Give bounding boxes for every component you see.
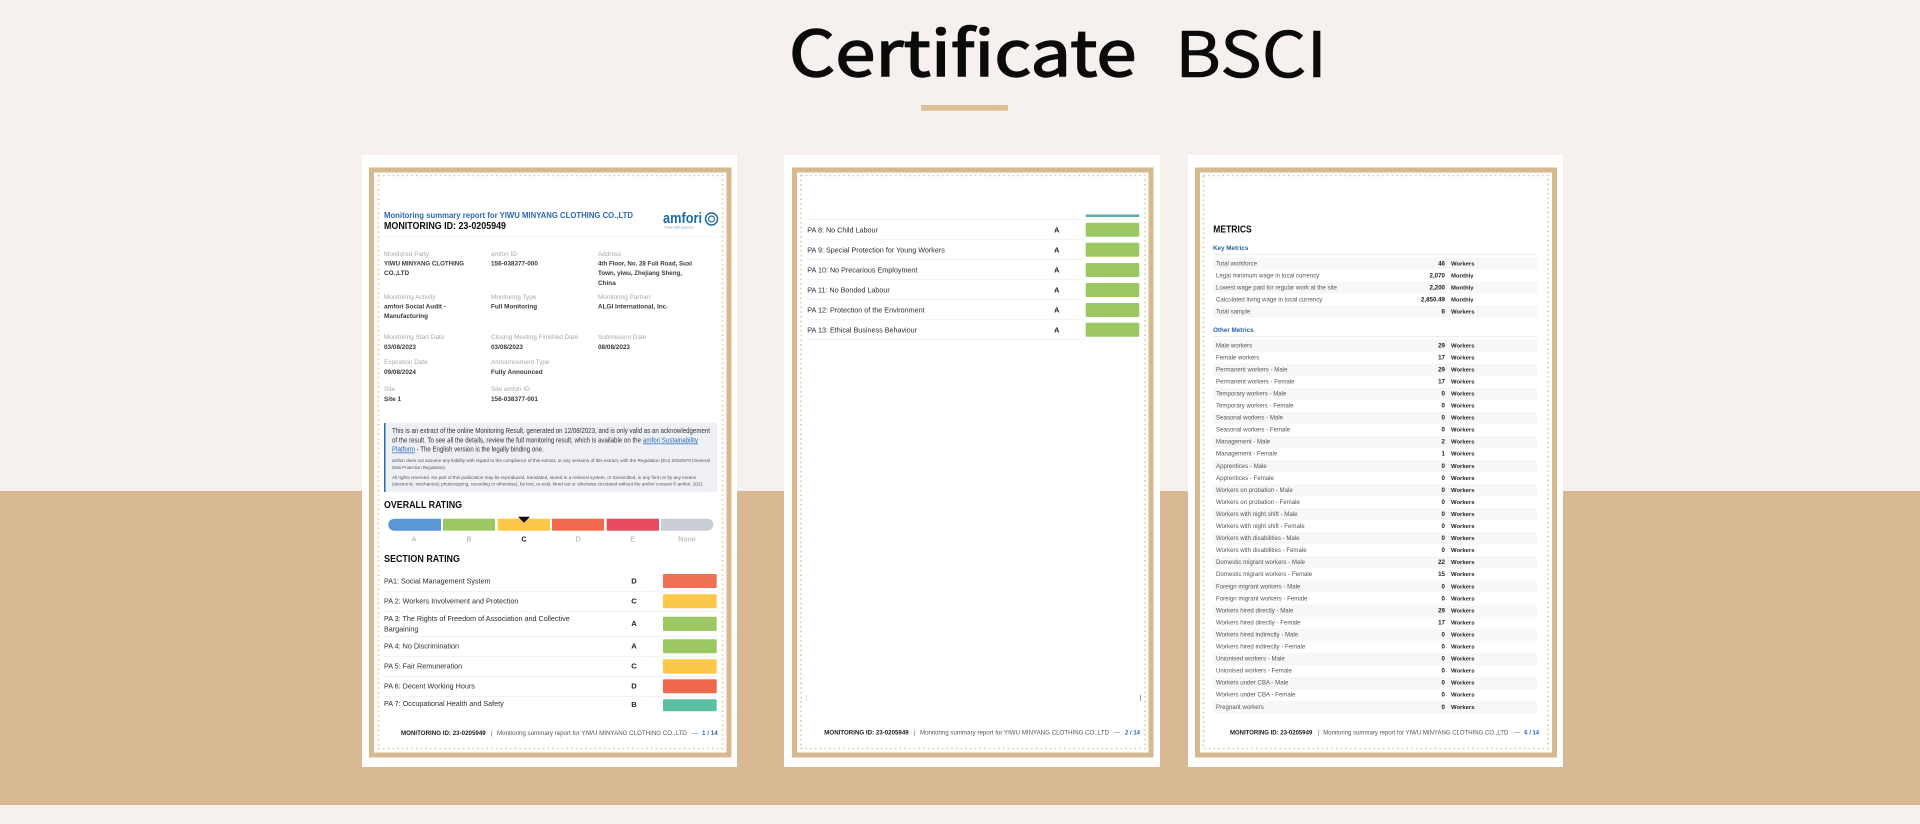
notice box: All rights reserved. No part of this publication may be reproduced, translated, stored in a retrieval system, or transmitted, in any form or by any means [392, 475, 696, 480]
key metrics table: Workers [1451, 261, 1475, 267]
audit detail fields: Site 1 [384, 396, 401, 403]
other metrics table: 0 [1442, 487, 1446, 494]
overall rating scale: None [678, 534, 696, 543]
page footer: MONITORING ID: 23-0205949 [824, 730, 909, 736]
other metrics table: 17 [1438, 354, 1446, 361]
page footer [1230, 730, 1540, 736]
overall rating scale: D [575, 534, 581, 543]
other metrics table: 0 [1442, 595, 1446, 602]
page footer: Monitoring summary report for YIWU MINYANG CLOTHING CO.,LTD [920, 730, 1110, 736]
section rating table: B [631, 700, 637, 709]
section rating table: D [631, 682, 637, 691]
other metrics table: 2 [1442, 439, 1446, 446]
report heading: MONITORING ID: 23-0205949 [384, 220, 506, 232]
other metrics table: Workers [1451, 452, 1475, 458]
audit detail fields: 03/08/2023 [491, 344, 523, 351]
audit detail fields: 156-038377-000 [491, 261, 538, 268]
other metrics table: Seasonal workers - Male [1216, 415, 1284, 422]
other metrics table: Workers [1451, 705, 1475, 711]
other metrics table: Workers [1451, 584, 1475, 590]
other metrics table: Workers [1451, 476, 1475, 482]
other metrics table: Management - Female [1216, 451, 1278, 458]
section rating continued: PA 10: No Precarious Employment [807, 265, 917, 274]
audit detail fields: Expiration Date [384, 359, 428, 366]
other metrics table: Workers [1451, 428, 1475, 434]
other metrics table: Workers [1451, 379, 1475, 385]
other metrics table: Unionised workers - Female [1216, 668, 1292, 675]
other metrics table: Apprentices - Female [1216, 475, 1275, 482]
page footer: Monitoring summary report for YIWU MINYANG CLOTHING CO.,LTD [497, 731, 687, 737]
other metrics table: 0 [1442, 583, 1446, 590]
page footer: MONITORING ID: 23-0205949 [1230, 730, 1313, 736]
key metrics table: 46 [1438, 260, 1446, 267]
audit detail fields: amfori Social Audit - [384, 304, 446, 311]
overall rating scale [388, 517, 713, 543]
report heading: Monitoring summary report for YIWU MINYANG CLOTHING CO.,LTD [384, 211, 633, 220]
other metrics table: Workers [1451, 512, 1475, 518]
other metrics table: Workers with disabilities - Female [1216, 547, 1307, 554]
other metrics table: 22 [1438, 559, 1446, 566]
other metrics table: Workers [1451, 536, 1475, 542]
audit detail fields: Closing Meeting Finished Date [491, 334, 578, 341]
audit detail fields: Town, yiwu, Zhejiang Sheng, [598, 270, 682, 277]
other metrics table: Workers [1451, 404, 1475, 410]
audit detail fields: Site [384, 386, 395, 393]
other metrics table: Domestic migrant workers - Female [1216, 571, 1313, 578]
page footer: MONITORING ID: 23-0205949 [401, 731, 486, 737]
other metrics table: Workers [1451, 657, 1475, 663]
section rating table: C [631, 597, 637, 606]
section rating continued: PA 13: Ethical Business Behaviour [807, 325, 918, 334]
section rating continued: A [1054, 305, 1060, 314]
audit detail fields: Monitoring Type [491, 294, 537, 301]
section rating table: PA 7: Occupational Health and Safety [384, 699, 504, 708]
other metrics table: Workers [1451, 440, 1475, 446]
other metrics table: 29 [1438, 607, 1446, 614]
other metrics table: Workers [1451, 560, 1475, 566]
other metrics table: Workers [1451, 596, 1475, 602]
key metrics table: Total workforce [1216, 260, 1258, 267]
other metrics table: Workers [1451, 416, 1475, 422]
title: Certificate [789, 4, 1136, 95]
key metrics table: 6 [1442, 308, 1446, 315]
section rating continued: PA 11: No Bonded Labour [807, 285, 890, 294]
other metrics table: Workers [1451, 669, 1475, 675]
rating bar remnant [1086, 214, 1139, 217]
other metrics table: 0 [1442, 668, 1446, 675]
other metrics table: Permanent workers - Female [1216, 378, 1295, 385]
other metrics table: Temporary workers - Female [1216, 402, 1294, 410]
other metrics table: 0 [1442, 511, 1446, 518]
section rating table: D [631, 577, 637, 586]
audit detail fields: 4th Floor, No. 28 Fuli Road, Suxi [598, 261, 692, 268]
key metrics table: 2,200 [1430, 284, 1446, 291]
other metrics table: Workers [1451, 524, 1475, 530]
title: BSCI [1175, 5, 1327, 96]
panel: certificate page 2 [784, 155, 1160, 767]
other metrics table: Domestic migrant workers - Male [1216, 559, 1306, 566]
overall rating scale: B [467, 534, 472, 543]
section rating continued [807, 220, 1139, 340]
other metrics table: Pregnant workers [1216, 704, 1264, 711]
key metrics table: Lowest wage paid for regular work at the site [1216, 284, 1338, 291]
other metrics table: Workers [1451, 464, 1475, 470]
key metrics table: Key Metrics [1213, 245, 1249, 252]
key metrics table: 2,850.49 [1421, 296, 1446, 303]
audit detail fields: Monitoring Start Date [384, 334, 445, 341]
audit detail fields: 09/08/2024 [384, 369, 416, 376]
other metrics table: Workers [1451, 681, 1475, 687]
other metrics table: 0 [1442, 475, 1446, 482]
other metrics table: 0 [1442, 390, 1446, 398]
other metrics table: Workers with night shift - Female [1216, 523, 1305, 530]
other metrics table: Workers [1451, 355, 1475, 361]
notice box: amfori Sustainability [643, 436, 698, 444]
page footer: Monitoring summary report for YIWU MINYANG CLOTHING CO.,LTD [1323, 730, 1509, 736]
other metrics table: Workers [1451, 488, 1475, 494]
page footer: 2 / 14 [1125, 730, 1141, 736]
other metrics table: Workers [1451, 548, 1475, 554]
other metrics table: 0 [1442, 644, 1446, 650]
overall rating scale: E [630, 534, 635, 543]
other metrics table: Female workers [1216, 354, 1259, 361]
report heading [384, 211, 633, 232]
page footer: | [1318, 730, 1320, 736]
other metrics table: Workers under CBA - Male [1216, 680, 1289, 687]
other metrics table: Workers on probation - Female [1216, 499, 1300, 506]
section rating continued: PA 12: Protection of the Environment [807, 305, 925, 314]
page footer: — [1114, 730, 1120, 736]
audit detail fields: China [598, 280, 616, 287]
other metrics table: Unionised workers - Male [1216, 656, 1285, 663]
page footer [824, 730, 1141, 736]
other metrics table: 0 [1442, 680, 1446, 687]
key metrics table: Total sample [1216, 308, 1251, 315]
key metrics table [1213, 245, 1537, 318]
audit detail fields: 156-038377-001 [491, 396, 538, 403]
audit detail fields: amfori ID [491, 251, 517, 258]
other metrics table: 0 [1442, 535, 1446, 542]
audit detail fields: Monitoring Partner [598, 294, 651, 301]
key metrics table: Monthly [1451, 273, 1474, 279]
other metrics table: 0 [1442, 704, 1446, 711]
section rating continued: PA 9: Special Protection for Young Workers [807, 245, 945, 254]
notice box: - The English version is the legally binding one. [417, 446, 544, 454]
other metrics table: 0 [1442, 415, 1446, 422]
audit detail fields: Manufacturing [384, 313, 428, 320]
other metrics table: 29 [1438, 342, 1446, 349]
overall rating scale: A [412, 534, 417, 543]
section rating continued: A [1054, 245, 1060, 254]
page footer: — [692, 731, 698, 737]
notice box: of the result. To see all the details, review the full monitoring result, which is available on the [392, 436, 641, 444]
tan background band [0, 491, 1920, 805]
section rating table: A [631, 619, 637, 628]
section rating table: PA 6: Decent Working Hours [384, 682, 475, 691]
audit detail fields: Monitored Party [384, 251, 430, 258]
other metrics table: Workers [1451, 572, 1475, 578]
section rating continued: PA 8: No Child Labour [807, 225, 878, 234]
other metrics table: 0 [1442, 547, 1446, 554]
page footer [401, 731, 718, 737]
section rating table [384, 574, 717, 711]
audit detail fields: Site amfori ID [491, 386, 530, 393]
audit detail fields: CO.,LTD [384, 270, 409, 277]
other metrics table: Foreign migrant workers - Female [1216, 595, 1308, 602]
section rating table: A [631, 642, 637, 651]
other metrics table: Apprentices - Male [1216, 463, 1267, 470]
audit detail fields: Full Monitoring [491, 304, 537, 311]
other metrics table: 17 [1438, 619, 1446, 626]
page footer: 6 / 14 [1524, 730, 1540, 736]
audit detail fields: YIWU MINYANG CLOTHING [384, 261, 464, 268]
section rating table: PA 3: The Rights of Freedom of Association and Collective [384, 614, 570, 623]
section rating continued: A [1054, 285, 1060, 294]
other metrics table [1213, 327, 1537, 713]
other metrics table: 0 [1442, 692, 1446, 699]
key metrics table: Calculated living wage in local currency [1216, 296, 1323, 303]
key metrics table: Monthly [1451, 297, 1474, 303]
other metrics table: 0 [1442, 523, 1446, 530]
notice box [384, 423, 717, 492]
notice box: (electronic, mechanical, photocopying, recording or otherwise), be lent, re-sold, hired out or otherwise circulated without the amfori consent © amfori, 2021 [392, 482, 704, 487]
key metrics table: Monthly [1451, 285, 1474, 291]
notice box: Platform [392, 446, 415, 454]
other metrics table: Workers [1451, 644, 1475, 650]
other metrics table: Workers under CBA - Female [1216, 692, 1296, 699]
audit detail fields: Announcement Type [491, 359, 550, 366]
heading: section rating: SECTION RATING [384, 554, 460, 565]
other metrics table: 0 [1442, 427, 1446, 434]
other metrics table: Workers [1451, 392, 1475, 398]
page footer: 1 / 14 [702, 731, 718, 737]
other metrics table: Workers [1451, 632, 1475, 638]
audit detail fields: 08/08/2023 [598, 344, 630, 351]
other metrics table: Workers [1451, 608, 1475, 614]
title underline [921, 105, 1008, 111]
audit detail fields: Monitoring Activity [384, 294, 436, 301]
audit detail fields: 03/08/2023 [384, 344, 416, 351]
other metrics table: Workers [1451, 620, 1475, 626]
heading: overall rating: OVERALL RATING [384, 500, 462, 511]
other metrics table: Management - Male [1216, 439, 1271, 446]
section rating table: C [631, 662, 637, 671]
other metrics table: 0 [1442, 499, 1446, 506]
other metrics table: Workers with disabilities - Male [1216, 535, 1300, 542]
other metrics table: Workers [1451, 343, 1475, 349]
audit detail fields: Address [598, 251, 621, 258]
notice box: Data Protection Regulation). [392, 465, 446, 470]
icon: amfori logo: amfori [663, 210, 702, 227]
icon: amfori logo: Trade with purpose [664, 226, 694, 230]
audit detail fields [384, 251, 692, 403]
other metrics table: Other Metrics [1213, 327, 1254, 334]
panel: certificate page 6 metrics [1188, 155, 1563, 767]
page footer: | [491, 731, 493, 737]
title [789, 4, 1327, 96]
notice box: This is an extract of the online Monitoring Result, generated on 12/08/2023, and is only valid as an acknowledgement [392, 427, 710, 435]
other metrics table: 29 [1438, 366, 1446, 373]
section rating table: Bargaining [384, 625, 418, 634]
section rating continued: A [1054, 225, 1060, 234]
section rating continued: A [1054, 325, 1060, 334]
other metrics table: Workers [1451, 693, 1475, 699]
other metrics table: 0 [1442, 463, 1446, 470]
other metrics table: Permanent workers - Male [1216, 366, 1288, 373]
other metrics table: 17 [1438, 378, 1446, 385]
other metrics table: Workers hired indirectly - Female [1216, 644, 1306, 650]
other metrics table: Workers on probation - Male [1216, 487, 1293, 494]
audit detail fields: Fully Announced [491, 369, 543, 376]
overall rating scale: C [521, 534, 527, 543]
other metrics table: 0 [1442, 632, 1446, 638]
section rating table: PA 2: Workers Involvement and Protection [384, 597, 518, 606]
other metrics table: Workers hired directly - Male [1216, 607, 1294, 614]
other metrics table: 1 [1442, 451, 1446, 458]
key metrics table: 2,070 [1430, 272, 1446, 279]
other metrics table: 0 [1442, 402, 1446, 410]
other metrics table: Workers [1451, 367, 1475, 373]
panel: certificate page 1 [362, 155, 737, 767]
other metrics table: Foreign migrant workers - Male [1216, 583, 1301, 590]
heading: metrics: METRICS [1213, 225, 1252, 236]
other metrics table: Temporary workers - Male [1216, 390, 1287, 398]
other metrics table: 15 [1438, 571, 1446, 578]
key metrics table: Workers [1451, 309, 1475, 315]
other metrics table: Workers hired indirectly - Male [1216, 632, 1299, 638]
page footer: — [1514, 730, 1520, 736]
section rating continued: A [1054, 265, 1060, 274]
other metrics table: 0 [1442, 656, 1446, 663]
other metrics table: Workers with night shift - Male [1216, 511, 1298, 518]
notice box: amfori does not assume any liability with regard to the compliance of this extract, or any versions of this extract, with the Regulation (EU) 2016/679 (General [392, 458, 710, 463]
section rating table: PA1: Social Management System [384, 577, 491, 586]
other metrics table: Workers [1451, 500, 1475, 506]
other metrics table: Male workers [1216, 342, 1252, 349]
audit detail fields: ALGI International, Inc. [598, 304, 668, 311]
section rating table: PA 4: No Discrimination [384, 642, 459, 651]
audit detail fields: Submission Date [598, 334, 647, 341]
page footer: | [914, 730, 916, 736]
section rating table: PA 5: Fair Remuneration [384, 662, 462, 671]
other metrics table: Seasonal workers - Female [1216, 427, 1291, 434]
other metrics table: Workers hired directly - Female [1216, 619, 1301, 626]
key metrics table: Legal minimum wage in local currency [1216, 272, 1320, 279]
